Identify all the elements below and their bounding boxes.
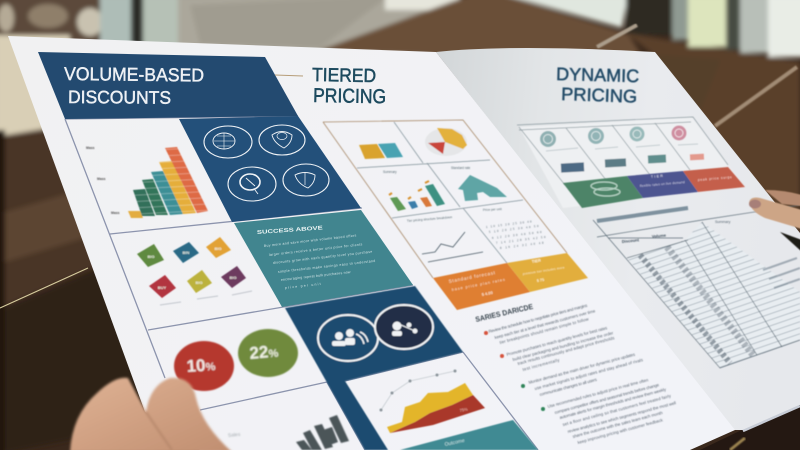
text: cell captions: Standard rate	[451, 166, 471, 170]
chart: stepped bars: Mass	[111, 211, 120, 215]
text: bullet lines: share the outcome with the sales team each month	[572, 410, 664, 439]
header: volume-based discounts	[38, 52, 298, 119]
grid: tiered pricing cells	[323, 120, 588, 310]
panel: icon grid	[179, 116, 361, 222]
text: cell captions: Price per unit	[483, 207, 502, 212]
text: cell captions	[383, 166, 546, 250]
hand: right holding page	[749, 190, 800, 252]
badge: 10 percent: 10%	[186, 355, 216, 376]
text: cell captions: Tier pricing structure breakdown	[407, 215, 453, 223]
text: bullet lines: tier breakpoints should remain simple to follow	[499, 316, 590, 345]
text: cell captions: 5 10 20 25 30 40 50	[489, 224, 539, 234]
heading: dynamic pricing: PRICING	[561, 84, 638, 107]
callout: orange tier: $ 4.00	[481, 290, 494, 297]
strip: green purple red tiers: peak price surge	[698, 175, 732, 182]
callout: orange tier: Standard forecast	[448, 270, 496, 284]
icon: speech globe	[228, 167, 276, 201]
header: volume-based discounts: VOLUME-BASED	[64, 63, 204, 85]
text: cell captions: 1 10 15 20 25 30 40	[486, 219, 532, 229]
chart: grey bars: Sales	[228, 432, 241, 439]
table: pricing data: Volume	[652, 232, 667, 239]
icon: people	[332, 329, 368, 346]
panel: teal summary: discounts grow with each quantity level you purchase	[273, 250, 373, 265]
text: bullet lines: Review the schedule how to negotiate price tiers and margins	[488, 303, 588, 334]
panel: right page	[436, 48, 800, 431]
panel: teal summary: simple thresholds make savings easy to understand	[278, 259, 376, 274]
text block: notes list	[474, 302, 677, 445]
icons: diamond tags: BIG	[214, 246, 222, 251]
text: bullet lines: set a floor and ceiling so that customers feel treated fairly	[562, 393, 672, 427]
chart: area trend	[380, 370, 485, 433]
callout: orange tier	[433, 263, 530, 310]
callout: yellow tier: $ 75	[537, 278, 544, 283]
chart: stepped bars: Mass	[97, 177, 106, 181]
text: bullet lines: Monitor demand as the main driver for dynamic price updates	[528, 352, 636, 385]
badge: 22 percent: 22%	[249, 342, 279, 363]
text: cell captions: Summary	[383, 170, 397, 174]
heading: dynamic pricing	[556, 64, 639, 107]
text: cell captions: 8 16 24 32 40 48	[500, 241, 544, 250]
icon: shield	[283, 164, 329, 196]
text: cell captions: 6 12 20 30 40 50 60	[492, 230, 542, 240]
heading: dynamic pricing: DYNAMIC	[556, 64, 639, 86]
callout: orange tier: base price plan rates	[451, 278, 505, 292]
icons: diamond tags: BIG	[147, 254, 155, 259]
icons: diamond tags: BIG	[229, 275, 237, 280]
text: bullet lines: Use recommended rules to adjust price in real time often	[547, 377, 649, 409]
callout: yellow tier	[507, 253, 588, 292]
chart: grey bars	[228, 415, 349, 450]
text: bullet lines: keep each tier at a level that rewards customers over time	[494, 308, 596, 340]
header: volume-based discounts: DISCOUNTS	[68, 87, 171, 108]
callout: yellow tier: premium tier includes more	[523, 265, 565, 276]
text: bullet lines: compare competitor offers and seasonal trends before change	[554, 382, 660, 415]
icon: location pin	[259, 125, 305, 155]
chart: stepped bars	[86, 145, 210, 220]
text: bullet lines	[488, 303, 677, 445]
icon: globe	[204, 126, 252, 158]
table: pricing data: Discount	[622, 237, 640, 244]
text: bullet lines: use market signals to adjust rates and stay ahead of rivals	[534, 357, 643, 391]
badge: 10 percent	[174, 341, 234, 391]
heading: notes: SARIES DARICDE	[474, 302, 534, 324]
text: cell captions: 7 14 21 28 35 42 50	[496, 235, 546, 245]
table: pricing data	[593, 205, 800, 368]
callout: yellow tier: TIER	[531, 258, 541, 264]
panel: teal footer	[400, 420, 538, 450]
bullets	[484, 331, 545, 411]
cell lines	[65, 116, 538, 450]
heading: tiered pricing: PRICING	[313, 85, 386, 108]
icons: diamond tags: BIG	[195, 280, 203, 285]
panel: teal summary: price per unit	[285, 282, 321, 290]
text: bullet lines: Promote purchases to reach quantity levels for best rates	[506, 325, 608, 357]
text: bullet lines: test incrementally	[522, 357, 561, 372]
panel: teal summary: SUCCESS ABOVE	[257, 225, 323, 236]
chart: small bars	[389, 181, 445, 211]
badge: 22 percent	[238, 329, 298, 377]
text: bullet lines: communicate changes to all users	[539, 377, 597, 397]
chart: stepped bars: Mass	[86, 146, 95, 150]
hand: left holding page	[70, 378, 232, 450]
icon: network	[392, 322, 418, 336]
heading: tiered pricing	[275, 65, 386, 108]
heading: tiered pricing: TIERED	[312, 65, 376, 87]
grid: pricing columns	[517, 117, 745, 208]
icons: diamond tags	[137, 237, 252, 305]
text: bullet lines: build clear packaging and bundling to increase the order	[512, 330, 614, 362]
table: pricing data: Summary	[715, 220, 731, 224]
panel: teal summary: larger orders receive a better unit price for clients	[269, 242, 363, 257]
text: bullet lines: automate alerts for margin thresholds and review them weekly	[559, 386, 667, 420]
icon: house	[458, 175, 507, 201]
icons: diamond tags: BIN	[183, 250, 190, 255]
panel: navy people icons	[285, 286, 463, 450]
panel: teal summary: Buy more and save more with volume based offers	[264, 233, 357, 248]
strip: green purple red tiers: TIER	[651, 174, 663, 179]
text: bullet lines: track results continuously and adapt price thresholds	[517, 335, 615, 366]
text: bullet lines: keep improving pricing with customer feedback	[577, 417, 664, 445]
panel: teal summary: encouraging repeat bulk purchases now	[281, 270, 351, 282]
panel: teal footer: Outcome	[444, 438, 465, 448]
strip: green purple red tiers	[563, 167, 745, 208]
icon: two tiles	[359, 143, 403, 159]
strip: green purple red tiers: flexible rates on live demand	[640, 180, 685, 188]
text: bullet lines: review analytics to see which segments respond the most well	[567, 400, 677, 434]
chart: area trend: 75%	[459, 406, 468, 413]
chart: line	[422, 232, 483, 262]
panel: teal summary	[234, 210, 413, 307]
chart: pie	[425, 128, 467, 156]
icons: diamond tags: BUY	[158, 285, 167, 290]
